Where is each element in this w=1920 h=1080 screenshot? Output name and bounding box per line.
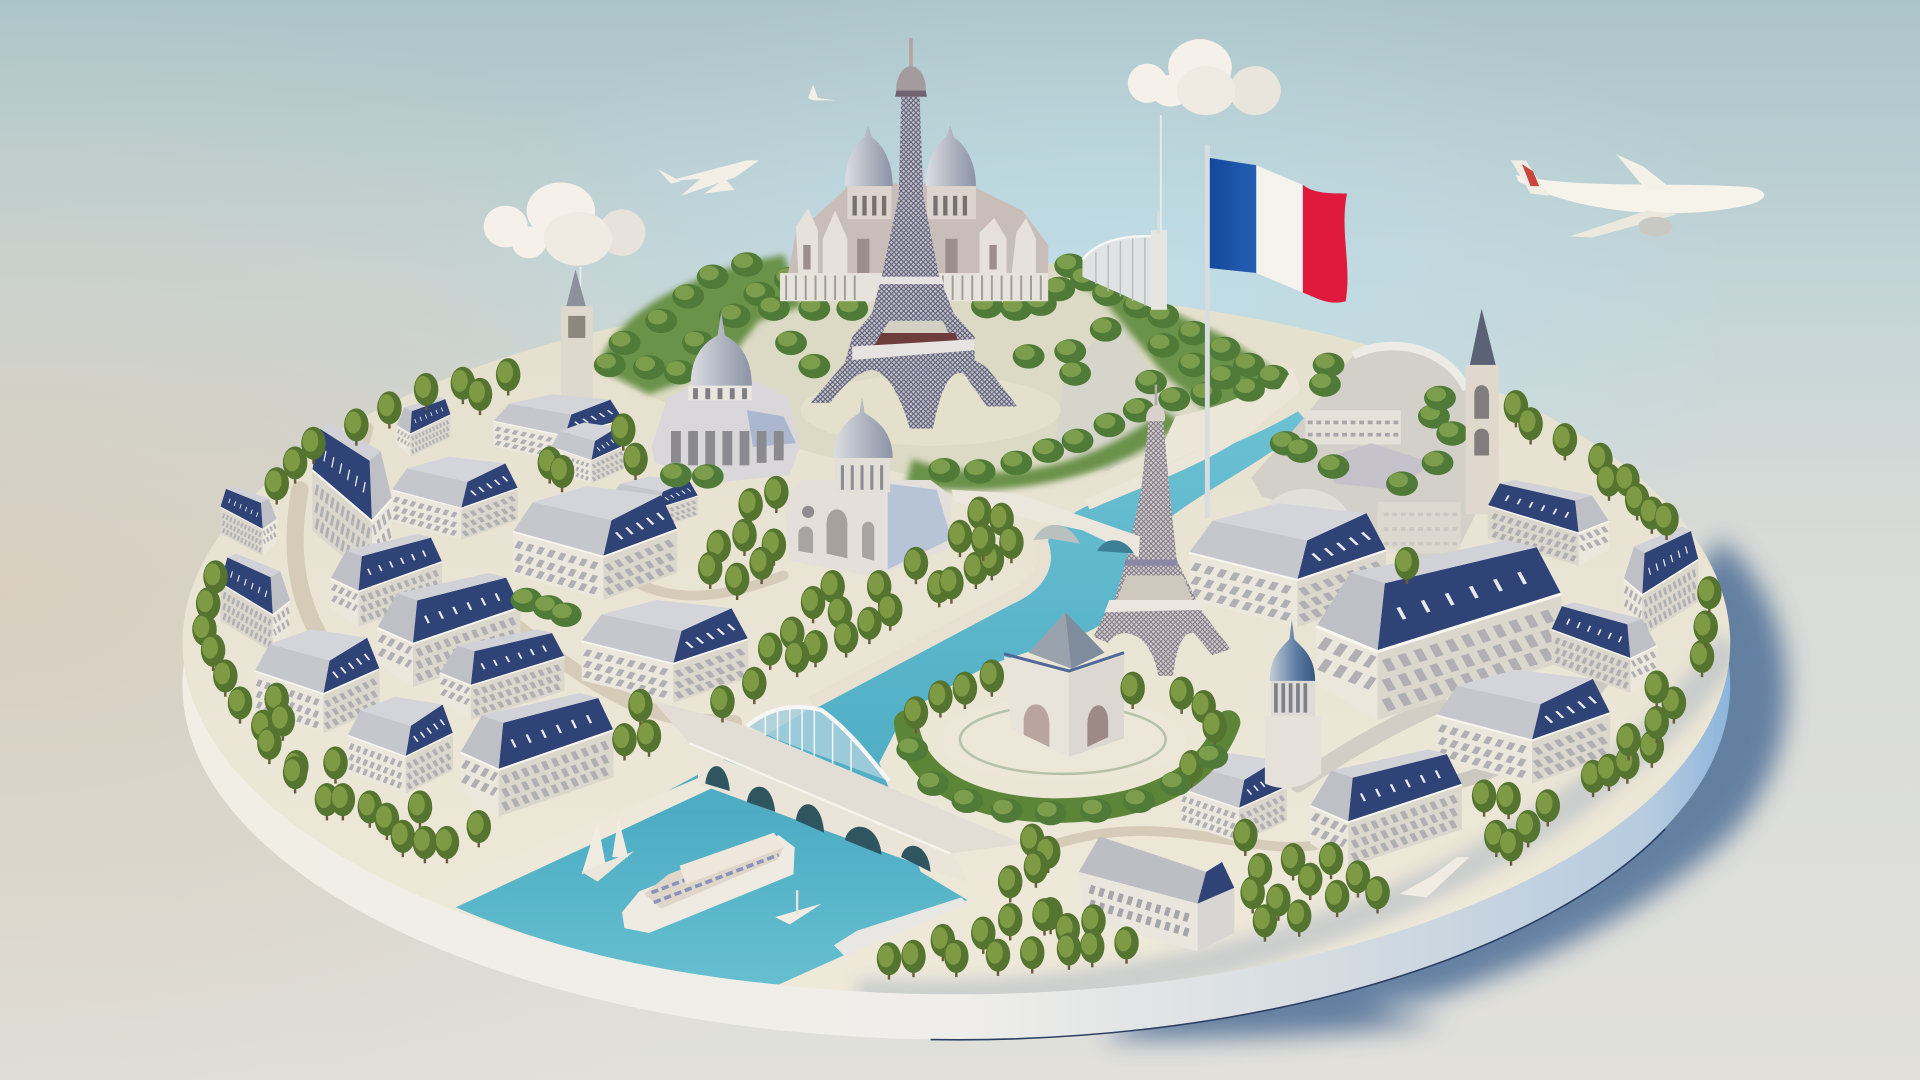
hedge around plaza — [906, 722, 1228, 811]
hill greenery — [594, 252, 1289, 484]
main bridge — [653, 700, 1024, 882]
platform — [182, 291, 1730, 1040]
big Eiffel Tower — [811, 38, 1018, 429]
bridge deck — [653, 700, 1024, 853]
streets and plazas — [295, 429, 1647, 847]
small bridge — [951, 490, 1140, 557]
river Seine — [453, 411, 1308, 984]
trees city centre — [511, 463, 1024, 760]
arch monument plaza — [939, 612, 1187, 781]
trees bottom — [877, 819, 1390, 980]
hill green patches — [598, 255, 1283, 490]
French flag — [1205, 144, 1347, 518]
background arch structure behind hill — [1082, 211, 1167, 310]
platform shadow — [1102, 539, 1787, 1039]
hill — [588, 252, 1300, 490]
buildings left group — [220, 394, 748, 817]
arch monument — [1004, 612, 1124, 757]
bridge arch span — [747, 707, 889, 781]
bridge wall — [698, 749, 967, 882]
cruise boat — [622, 833, 795, 933]
buildings right group — [1180, 480, 1698, 867]
sailboats — [582, 818, 822, 924]
airplane right — [1511, 154, 1764, 238]
domed rotunda tower — [1265, 620, 1321, 788]
clouds — [484, 39, 1281, 300]
Sacre-Coeur basilica — [780, 125, 1048, 301]
building front with grey roof — [1079, 836, 1234, 951]
tower right — [1466, 309, 1499, 514]
tower left — [561, 269, 593, 398]
cloud right — [1128, 39, 1281, 115]
central dome church — [784, 397, 951, 577]
airplane small — [658, 160, 759, 196]
small Eiffel Tower — [1093, 384, 1231, 676]
river quays — [424, 377, 1293, 909]
platform rim — [182, 332, 1730, 1040]
small boat right — [1400, 857, 1469, 898]
Eiffel plateau — [801, 375, 1060, 446]
platform top surface — [182, 291, 1730, 994]
basilica domes — [845, 125, 976, 219]
bird — [808, 84, 835, 100]
trees right — [1395, 390, 1722, 866]
trees around plaza — [896, 659, 1228, 825]
cloud left — [484, 182, 645, 266]
trees left rim — [192, 358, 648, 863]
docked boat — [834, 898, 967, 956]
left dome church — [651, 312, 800, 482]
background pale district right — [1251, 346, 1476, 576]
